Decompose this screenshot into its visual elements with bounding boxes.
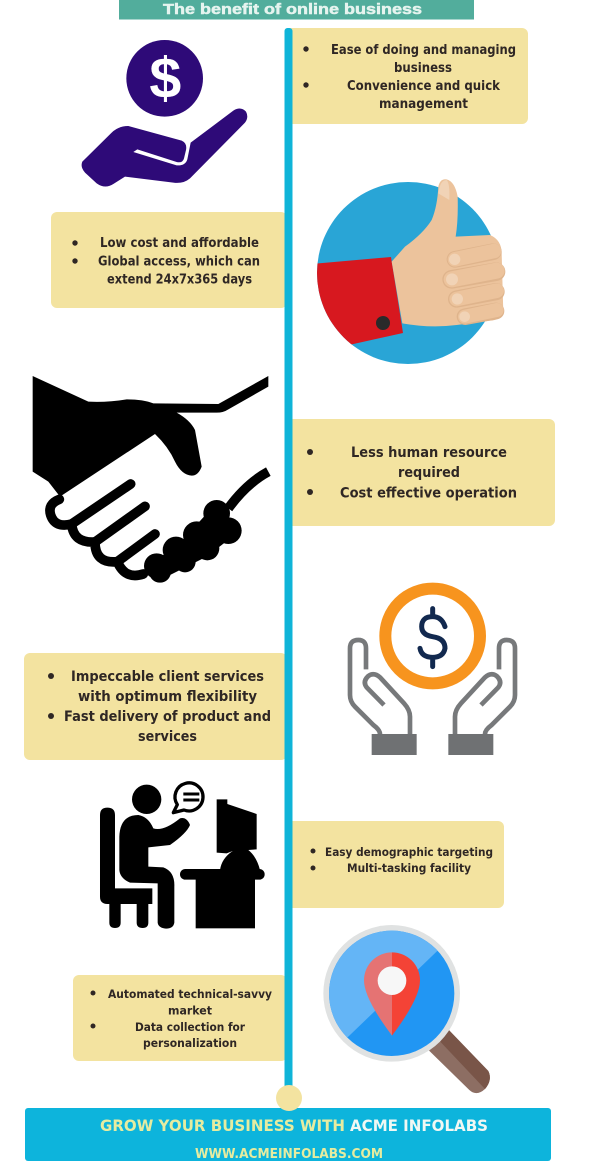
icon: hands around dollar ring	[350, 589, 515, 755]
panel: ease of doing and managing business: Ease of doing and managing	[331, 43, 516, 58]
icon: hand holding dollar coin	[82, 40, 247, 187]
panel: automated technical-savvy market: Automated technical-savvy	[108, 987, 272, 1001]
footer banner	[25, 1108, 551, 1161]
panel: less human resource	[286, 419, 555, 526]
panel: ease of doing and managing business: management	[379, 97, 468, 112]
panel: ease of doing and managing business: Convenience and quick	[347, 79, 500, 94]
panel: easy demographic targeting	[286, 821, 504, 908]
panel: less human resource: required	[398, 465, 460, 481]
panel: less human resource: Cost effective operation	[340, 486, 517, 502]
panel: low cost and global access: Global access, which can	[98, 254, 260, 270]
panel: impeccable client services	[24, 653, 287, 760]
icon: hand holding dollar coin: $	[149, 47, 181, 111]
panel: impeccable client services: Fast delivery of product and	[64, 709, 271, 725]
footer banner: GROW YOUR BUSINESS WITH	[100, 1116, 345, 1135]
panel: easy demographic targeting: Easy demographic targeting	[325, 845, 493, 859]
panel: easy demographic targeting: Multi-tasking facility	[347, 861, 471, 875]
panel: impeccable client services: with optimum flexibility	[78, 689, 258, 705]
panel: automated technical-savvy market: personalization	[143, 1036, 237, 1050]
panel: ease of doing and managing business	[286, 28, 528, 124]
title banner	[119, 0, 474, 20]
title banner: The benefit of online business	[163, 2, 422, 18]
panel: low cost and global access: extend 24x7x365 days	[107, 272, 252, 288]
panel: automated technical-savvy market: Data collection for	[135, 1020, 245, 1034]
panel: ease of doing and managing business: business	[394, 61, 452, 76]
timeline end dot	[276, 1085, 302, 1111]
icon: magnifier with location pin	[323, 925, 490, 1093]
panel: impeccable client services: services	[138, 729, 197, 745]
icon: thumbs up	[300, 179, 503, 364]
icon: person at computer desk	[100, 783, 260, 929]
panel: automated technical-savvy market: market	[168, 1004, 212, 1018]
panel: automated technical-savvy market	[73, 975, 287, 1061]
timeline vertical line	[284, 28, 292, 1093]
footer banner: ACME INFOLABS	[350, 1116, 488, 1135]
panel: less human resource: Less human resource	[351, 445, 507, 461]
panel: low cost and global access: Low cost and affordable	[100, 236, 259, 251]
panel: low cost and global access	[51, 212, 287, 308]
icon: handshake	[33, 376, 268, 583]
panel: impeccable client services: Impeccable client services	[71, 669, 264, 685]
